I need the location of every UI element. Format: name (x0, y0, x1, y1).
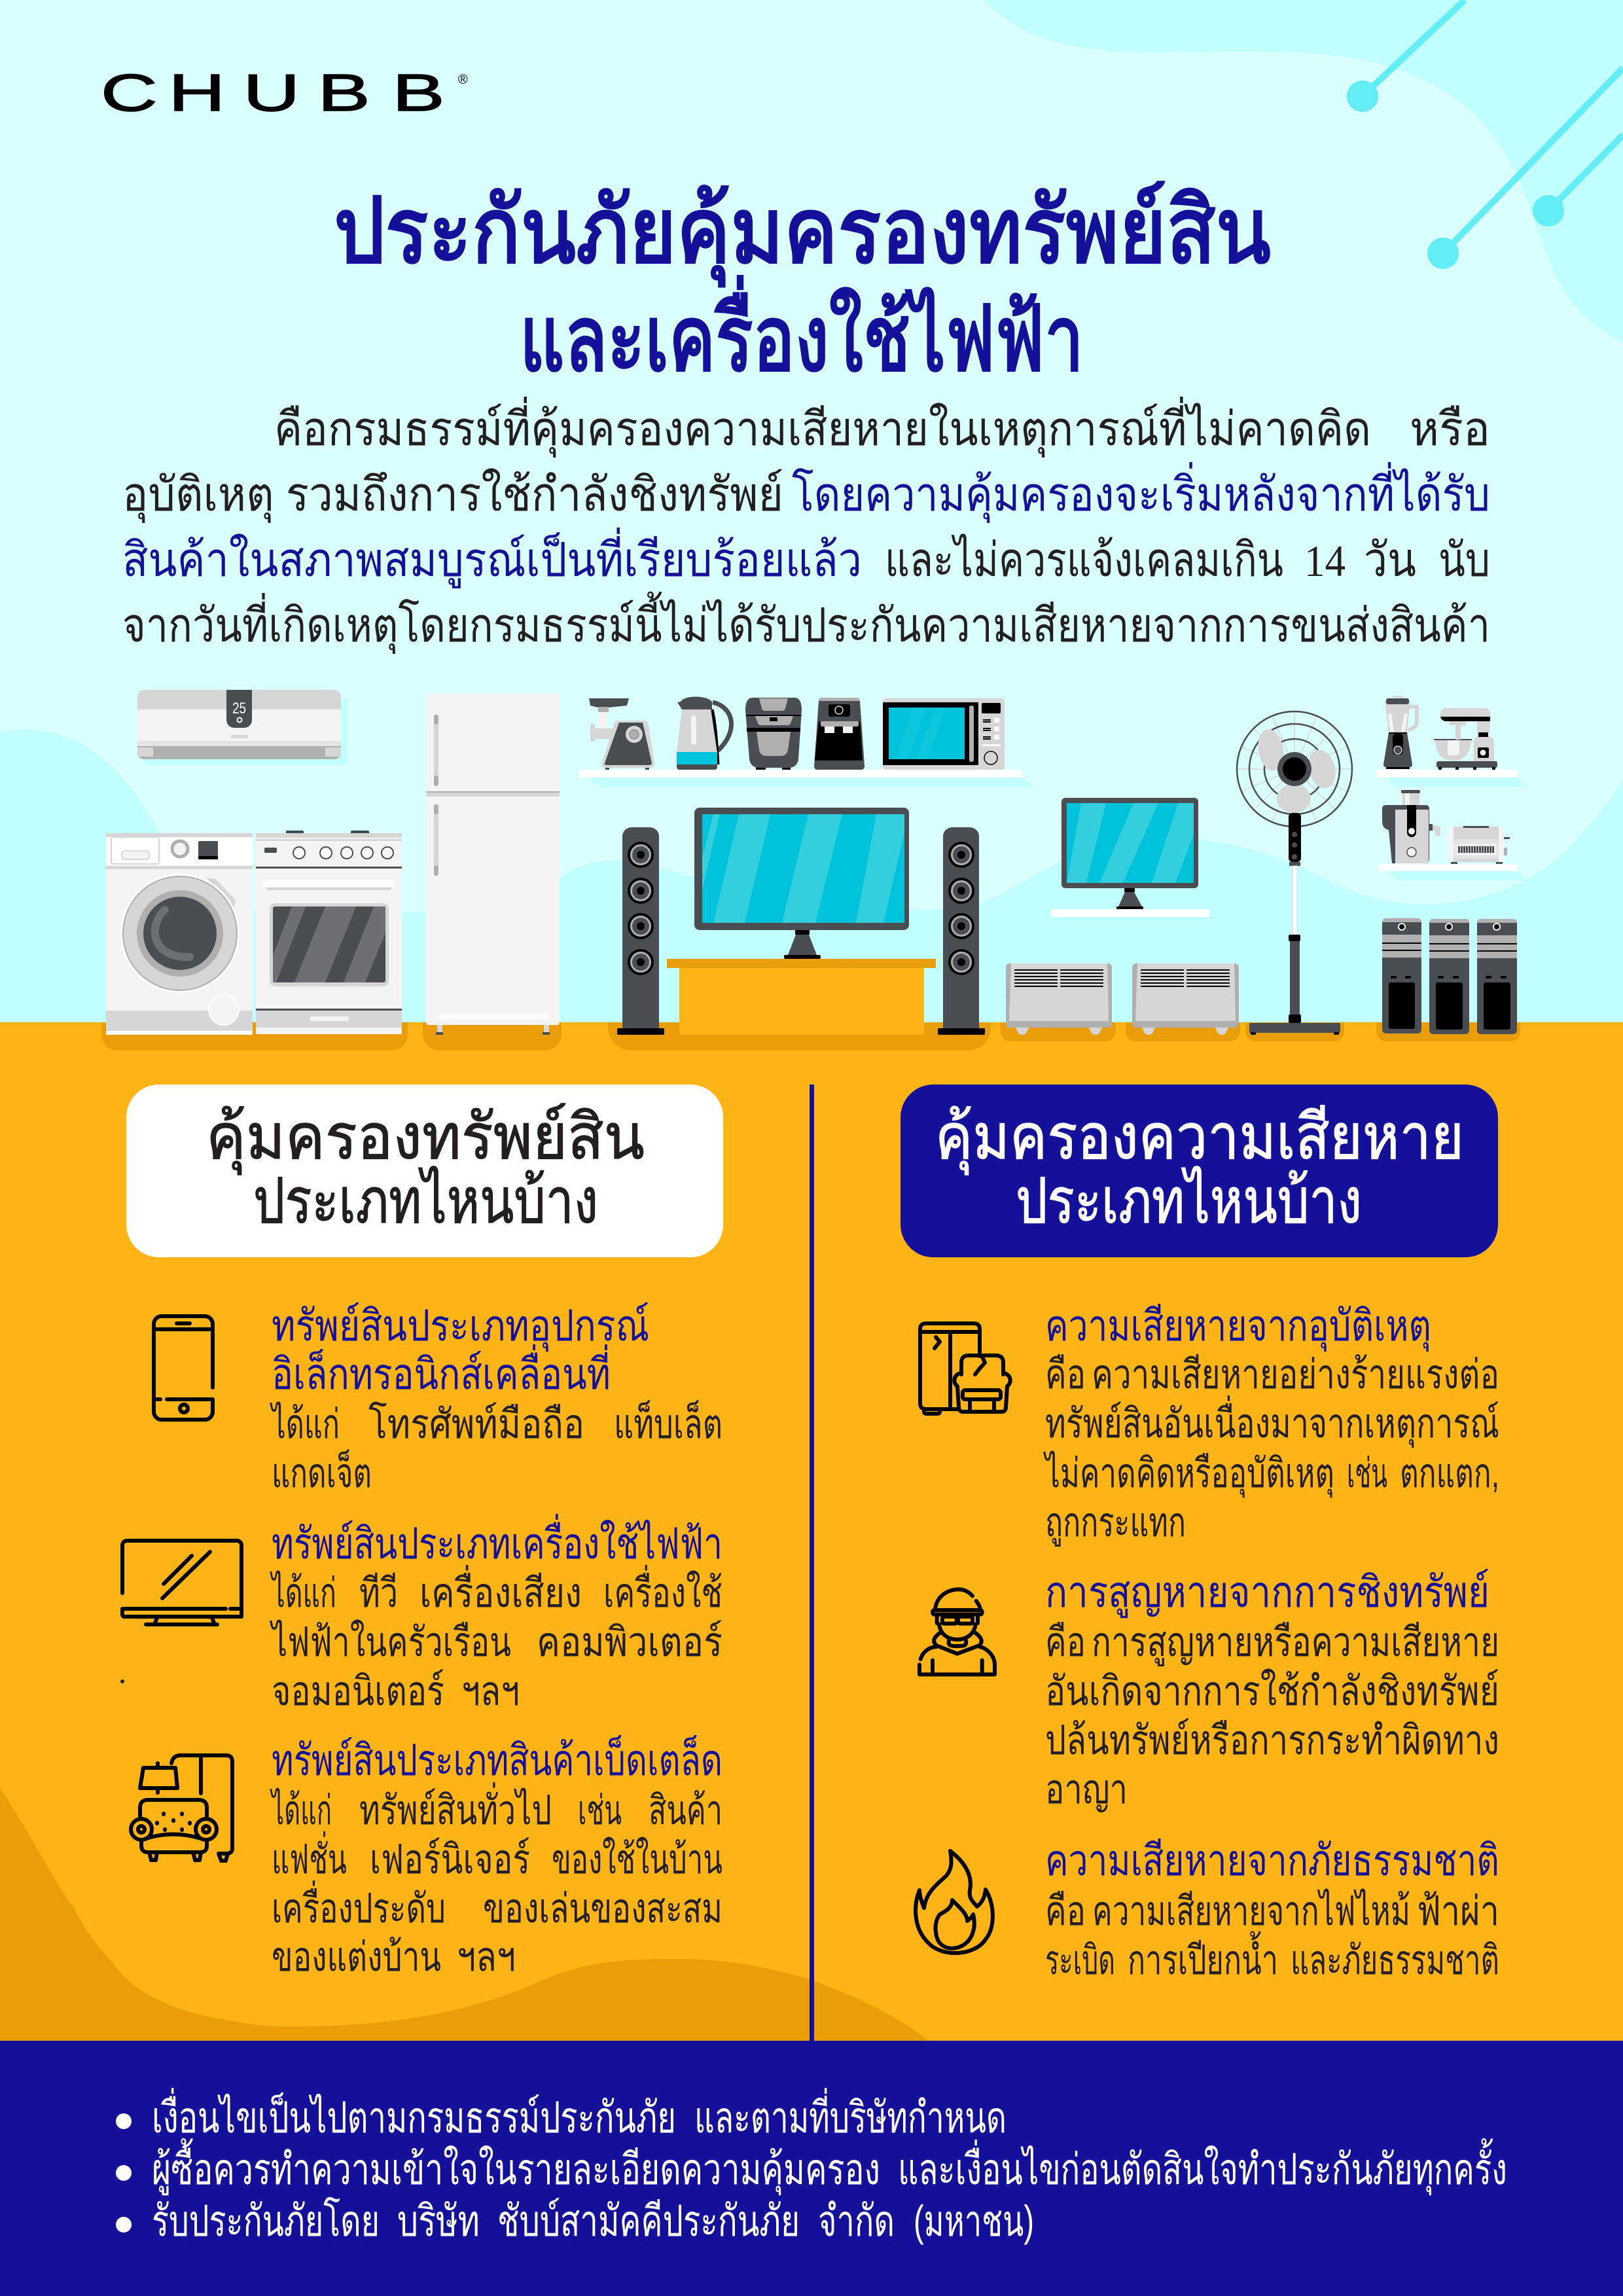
text block: theft loss: คือ (1045, 1620, 1086, 1665)
illustration: standing fan (1237, 711, 1352, 1035)
footer bullet list: เงื่อนไขเป็นไปตามกรมธรรม์ประกันภัย (152, 2088, 676, 2142)
text block: miscellaneous goods: ทรัพย์สินทั่วไป (359, 1782, 552, 1833)
title (334, 179, 1271, 390)
text block: accidental damage: ไม่คาดคิดหรืออุบัติเหตุ (1043, 1450, 1334, 1498)
text block: accidental damage: ความเสียหายจากอุบัติเหตุ (1045, 1301, 1431, 1352)
footer bullet list (116, 2088, 1507, 2245)
intro paragraph: หรือ (1410, 403, 1490, 456)
text block: miscellaneous goods: ทรัพย์สินประเภทสินค้าเบ็ดเตล็ด (272, 1734, 722, 1784)
text block: electrical appliances: ทรัพย์สินประเภทเครื่องใช้ไฟฟ้า (272, 1514, 722, 1568)
text block: mobile electronics: ทรัพย์สินประเภทอุปกรณ์ (272, 1301, 649, 1352)
text block: miscellaneous goods: ฯลฯ (457, 1935, 516, 1980)
illustration: gas stove and oven (256, 831, 402, 1034)
text block: miscellaneous goods: แฟชั่น (272, 1831, 347, 1882)
text block: miscellaneous goods (270, 1734, 722, 1980)
intro paragraph (122, 397, 1490, 654)
intro paragraph: สินค้าในสภาพสมบูรณ์เป็นที่เรียบร้อยแล้ว (122, 528, 862, 588)
panel heading: covered damage (901, 1085, 1498, 1257)
text block: electrical appliances: ได้แก่ (270, 1570, 336, 1616)
text block: accidental damage: ทรัพย์สินอันเนื่องมาจากเหตุการณ์ (1045, 1395, 1499, 1448)
text block: theft loss: การสูญหายจากการชิงทรัพย์ (1045, 1568, 1489, 1619)
illustration: large TV (694, 808, 909, 959)
background blob: bottom left orange (0, 1788, 931, 2043)
intro paragraph: โดยความคุ้มครองจะเริ่มหลังจากที่ได้รับ (792, 462, 1490, 523)
meat grinder (589, 698, 654, 770)
logo: Chubb: CHUBB (101, 63, 445, 122)
text block: accidental damage: ตกแตก, (1400, 1451, 1499, 1496)
water dispenser (814, 698, 865, 770)
illustration: right speaker (938, 827, 985, 1035)
column divider (810, 1085, 814, 2043)
stray dot (120, 1679, 124, 1683)
illustration: left speaker (617, 827, 664, 1035)
logo: Chubb: ® (458, 73, 468, 87)
text block: miscellaneous goods: ของเล่นของสะสม (483, 1886, 722, 1931)
icon: broken furniture (920, 1323, 1010, 1414)
text block: mobile electronics: แท็บเล็ต (614, 1400, 722, 1447)
blender (1383, 696, 1417, 769)
panel heading: covered damage: ประเภทไหนบ้าง (1016, 1166, 1362, 1236)
icon: flame (916, 1851, 993, 1953)
illustration: heater 2 (1132, 963, 1239, 1035)
illustration: TV stand (667, 959, 936, 1035)
illustration: upper shelf with small appliances (579, 696, 1033, 787)
text block: miscellaneous goods: เครื่องประดับ (272, 1880, 446, 1931)
illustration: computer monitor on shelf (1051, 798, 1209, 917)
intro paragraph: อุบัติเหตุ รวมถึงการใช้กำลังชิงทรัพย์ (122, 468, 783, 523)
text block: electrical appliances: เครื่องใช้ (603, 1565, 722, 1616)
text block: theft loss: การสูญหายหรือความเสียหาย (1092, 1620, 1499, 1666)
text block: theft loss: อาญา (1045, 1767, 1128, 1812)
intro paragraph: นับ (1438, 534, 1490, 586)
text block: theft loss (1045, 1568, 1499, 1812)
text block: electrical appliances: ฯลฯ (461, 1669, 520, 1714)
illustration: right upper shelf with blender and mixer (1377, 696, 1527, 787)
text block: accidental damage: ความเสียหายอย่างร้ายแรงต่อ (1092, 1352, 1499, 1397)
text block: accidental damage: คือ (1045, 1352, 1086, 1397)
text block: natural disaster damage: ระเบิด (1045, 1938, 1115, 1983)
illustration: air conditioner (137, 690, 348, 765)
text block: natural disaster damage: ความเสียหายจากภัยธรรมชาติ (1045, 1836, 1499, 1884)
text block: electrical appliances: ทีวี (359, 1571, 398, 1616)
footer bullet list: และตามที่บริษัทกำหนด (694, 2088, 1007, 2142)
text block: miscellaneous goods: สินค้า (649, 1788, 722, 1833)
footer bullet list: (มหาชน) (914, 2197, 1034, 2245)
juicer (1382, 790, 1440, 863)
text block: accidental damage: เช่น (1347, 1451, 1387, 1496)
illustration: air conditioner: 25 (232, 700, 246, 717)
intro paragraph: คือกรมธรรม์ที่คุ้มครองความเสียหายในเหตุการณ์ที่ไม่คาดคิด (274, 397, 1371, 457)
intro paragraph: วัน (1364, 534, 1416, 586)
text block: mobile electronics: ได้แก่ (270, 1401, 340, 1447)
text block: electrical appliances: ไฟฟ้าในครัวเรือน (269, 1619, 511, 1665)
title: และเครื่องใช้ไฟฟ้า (520, 276, 1084, 390)
panel heading: covered property (126, 1085, 723, 1257)
text block: natural disaster damage: ฟ้าผ่า (1417, 1889, 1499, 1934)
toaster (1449, 826, 1510, 864)
text block: theft loss: ปล้นทรัพย์หรือการกระทำผิดทาง (1045, 1718, 1499, 1763)
footer bullet list: ผู้ซื้อควรทำความเข้าใจในรายละเอียดความคุ้มครอง (152, 2138, 880, 2196)
illustration: computer towers (1382, 918, 1517, 1034)
text block: accidental damage (1043, 1301, 1499, 1547)
microwave (883, 698, 1005, 770)
text block: miscellaneous goods: ของแต่งบ้าน (272, 1935, 441, 1980)
panel heading: covered damage: คุ้มครองความเสียหาย (935, 1102, 1464, 1175)
text block: miscellaneous goods: เฟอร์นิเจอร์ (370, 1837, 530, 1882)
text block: electrical appliances: จอมอนิเตอร์ (272, 1669, 444, 1714)
footer bullet list: ชับบ์สามัคคีประกันภัย (497, 2197, 800, 2245)
text block: mobile electronics: โทรศัพท์มือถือ (368, 1401, 584, 1447)
footer bullet list: จำกัด (818, 2197, 895, 2245)
panel heading: covered property: ประเภทไหนบ้าง (253, 1166, 598, 1236)
text block: mobile electronics (270, 1301, 722, 1496)
background blob: top right (983, 0, 1623, 343)
icon: television (122, 1541, 241, 1624)
illustration: heater 1 (1006, 963, 1112, 1035)
stand mixer (1434, 708, 1497, 770)
icon: masked thief (919, 1589, 995, 1674)
footer bullet list: รับประกันภัยโดย (152, 2197, 380, 2245)
text block: natural disaster damage: และภัยธรรมชาติ (1291, 1938, 1499, 1983)
text block: natural disaster damage: คือ (1045, 1889, 1086, 1934)
text block: natural disaster damage (1045, 1836, 1499, 1983)
panel heading: covered property: คุ้มครองทรัพย์สิน (206, 1102, 645, 1175)
text block: accidental damage: ถูกกระแทก (1045, 1500, 1186, 1547)
text block: mobile electronics: แกดเจ็ต (272, 1449, 372, 1496)
text block: electrical appliances (269, 1514, 722, 1714)
text block: electrical appliances: คอมพิวเตอร์ (537, 1620, 722, 1665)
bread maker (745, 698, 802, 770)
title: ประกันภัยคุ้มครองทรัพย์สิน (334, 179, 1271, 287)
footer bullet list: บริษัท (397, 2197, 480, 2245)
text block: miscellaneous goods: เช่น (578, 1788, 622, 1833)
text block: miscellaneous goods: ได้แก่ (270, 1787, 332, 1833)
text block: miscellaneous goods: ของใช้ในบ้าน (552, 1837, 722, 1882)
illustration: right lower shelf with juicer and toaster (1378, 790, 1527, 880)
decorative circuit lines: top right (1347, 0, 1623, 269)
intro paragraph: และไม่ควรแจ้งเคลมเกิน (885, 533, 1283, 586)
text block: electrical appliances: เครื่องเสียง (419, 1565, 582, 1616)
background blob: behind appliances (0, 730, 1623, 1028)
text block: natural disaster damage: ความเสียหายจากไฟไหม้ (1092, 1888, 1410, 1934)
intro paragraph: 14 (1304, 536, 1346, 586)
icon: smartphone (154, 1316, 213, 1420)
illustration: washing machine (106, 833, 253, 1035)
text block: theft loss: อันเกิดจากการใช้กำลังชิงทรัพย์ (1045, 1668, 1499, 1714)
text block: natural disaster damage: การเปียกน้ำ (1128, 1931, 1278, 1983)
floor shadows under appliances (101, 1022, 1520, 1050)
icon: furniture and lamp (131, 1755, 232, 1861)
illustration: refrigerator (426, 694, 560, 1035)
text block: mobile electronics: อิเล็กทรอนิกส์เคลื่อนที่ (272, 1344, 611, 1398)
electric kettle (677, 696, 731, 770)
footer panel (0, 2041, 1623, 2296)
floor (0, 1022, 1623, 2043)
